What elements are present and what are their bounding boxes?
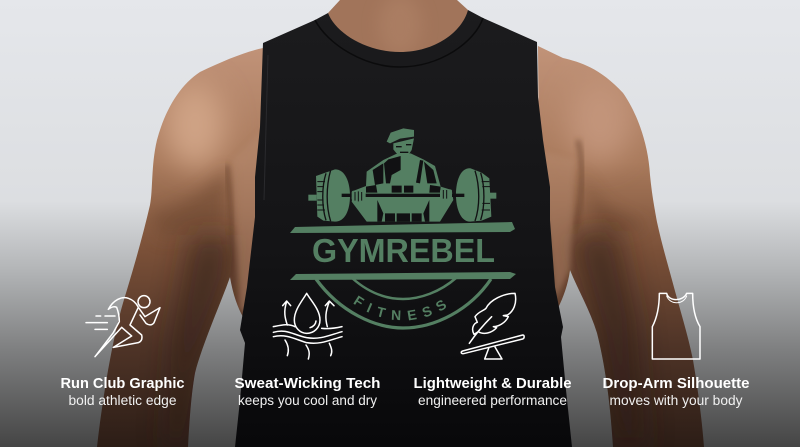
subtext: engineered performance: [418, 393, 567, 408]
icon: feather on balance: [461, 293, 524, 359]
right arm: [530, 40, 710, 447]
feature: Sweat-Wicking Tech: [234, 293, 380, 408]
logo wordmark: GYMREBEL: [312, 232, 495, 269]
feature: Lightweight & Durable: [414, 293, 572, 408]
icon: sprinting runner: [86, 296, 160, 357]
logo left plates: [308, 169, 350, 222]
heading: Run Club Graphic: [60, 375, 184, 392]
logo: GymRebel Fitness: [290, 128, 516, 330]
heading: Drop-Arm Silhouette: [602, 375, 750, 392]
logo right plates: [456, 168, 496, 222]
logo lower band: [290, 272, 516, 280]
left arm: [90, 40, 270, 447]
black tank top: [235, 10, 572, 447]
neck collar seam: [315, 18, 483, 67]
subtext: moves with your body: [610, 393, 743, 408]
feature: Run Club Graphic: [60, 296, 184, 408]
icon: droplet with wicking waves: [273, 293, 342, 359]
heading: Lightweight & Durable: [414, 375, 572, 392]
neck: [326, 0, 470, 60]
logo lifter: [352, 128, 453, 222]
logo arcs: [316, 279, 491, 328]
logo barbell: [342, 189, 464, 201]
subtext: keeps you cool and dry: [238, 393, 377, 408]
logo FITNESS arc text: FITNESS: [354, 296, 446, 320]
icon: tank top outline: [652, 293, 700, 359]
heading: Sweat-Wicking Tech: [234, 375, 380, 392]
logo upper band: [290, 222, 515, 233]
feature: Drop-Arm Silhouette: [602, 293, 750, 408]
model body: [90, 0, 710, 447]
subtext: bold athletic edge: [68, 393, 176, 408]
